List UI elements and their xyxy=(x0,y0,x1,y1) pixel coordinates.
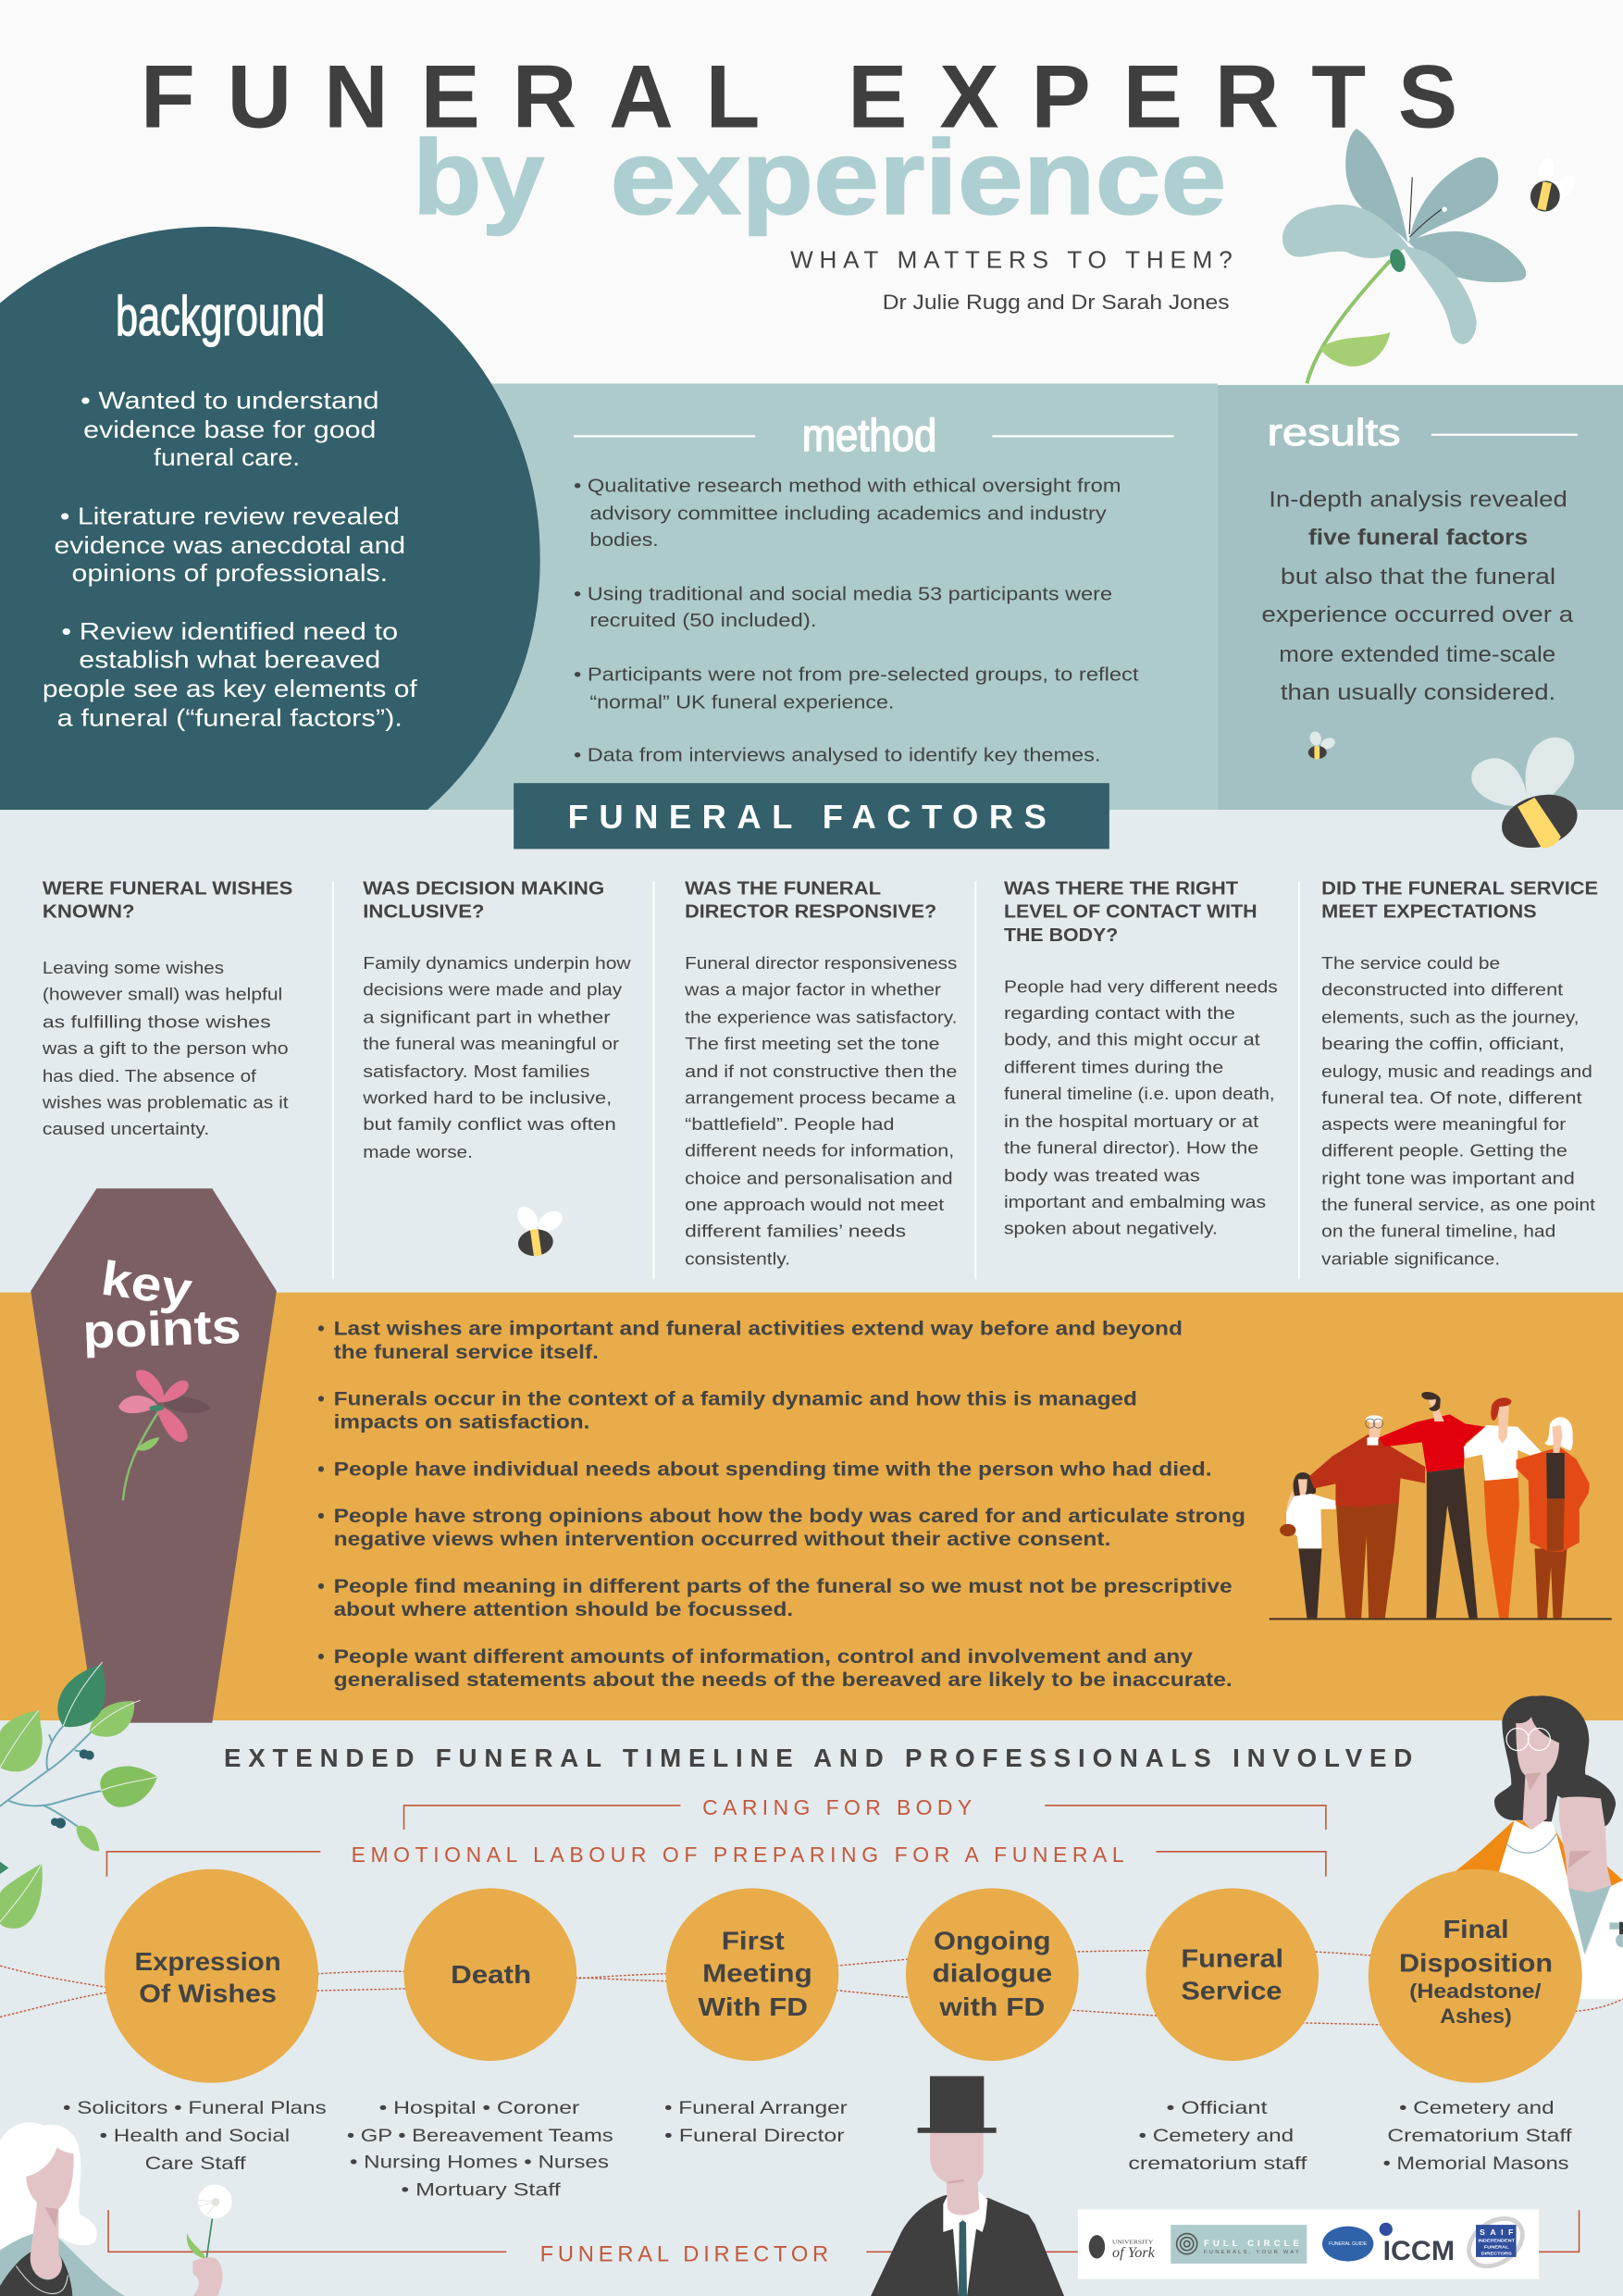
factor 3: director responsive: one approach would not meet xyxy=(685,1195,945,1214)
logo: SAIF: FUNERAL xyxy=(1484,2244,1509,2250)
factor 5: service expectations: on the funeral timeline, had xyxy=(1321,1222,1555,1241)
factor 2: decision making: a significant part in whether xyxy=(363,1008,611,1027)
professionals list: final disposition: • Memorial Masons xyxy=(1383,2153,1569,2174)
background bullet text: evidence was anecdotal and xyxy=(55,531,405,559)
factor 5: service expectations: The service could be xyxy=(1321,953,1500,973)
professionals list: death: • GP • Bereavement Teams xyxy=(347,2126,613,2146)
background bullet text: opinions of professionals. xyxy=(71,559,388,587)
tagline: WHAT MATTERS TO THEM? xyxy=(790,245,1233,273)
panel: timeline background xyxy=(0,1720,1623,2296)
child xyxy=(1280,1472,1335,1618)
timeline node: final disposition: (Headstone/ xyxy=(1409,1980,1541,2003)
factor 1: wishes known: has died. The absence of xyxy=(43,1066,257,1086)
key points list: impacts on satisfaction. xyxy=(334,1411,589,1433)
timeline node: first meeting with FD: With FD xyxy=(698,1992,808,2021)
label: caring for body: CARING FOR BODY xyxy=(702,1795,972,1819)
column dividers xyxy=(332,881,1300,1279)
panel: method xyxy=(0,383,1218,810)
key points list: People have strong opinions about how the body was cared for and articulate strong xyxy=(334,1505,1245,1527)
icon: large bee xyxy=(1471,738,1583,856)
factor 1: wishes known: was a gift to the person who xyxy=(42,1038,289,1058)
background bullet text: evidence base for good xyxy=(83,416,376,443)
factor 1: wishes known: as fulfilling those wishes xyxy=(43,1011,271,1031)
subtitle script: by experience: by xyxy=(413,119,544,237)
factor 5: service expectations: the funeral service, as one point xyxy=(1321,1195,1596,1214)
heading: key: key xyxy=(98,1252,195,1318)
method bullet list: • Participants were not from pre-selected groups, to reflect xyxy=(574,664,1139,685)
professionals list: first meeting: • Funeral Director xyxy=(664,2126,845,2146)
results text: but also that the funeral xyxy=(1281,565,1555,590)
label: caring for body xyxy=(404,1795,1326,1830)
illustration: family group xyxy=(1270,1392,1612,1620)
heading: results: results xyxy=(1268,411,1401,453)
factor 1: wishes known: wishes was problematic as it xyxy=(42,1092,289,1111)
timeline node: final disposition: Final xyxy=(1443,1915,1509,1943)
timeline node: final disposition: Disposition xyxy=(1399,1948,1553,1977)
key points list: People have individual needs about spending time with the person who had died. xyxy=(334,1458,1212,1480)
timeline node: ongoing dialogue with FD: dialogue xyxy=(932,1959,1052,1988)
key points list: about where attention should be focussed. xyxy=(334,1598,793,1620)
factor 1: wishes known: caused uncertainty. xyxy=(43,1119,209,1138)
label: funeral director xyxy=(108,2210,1580,2267)
background bullet text: funeral care. xyxy=(154,443,300,471)
factor 5: service expectations: aspects were meaningful for xyxy=(1321,1114,1566,1134)
dashed connector lines xyxy=(0,1950,1623,2026)
key points list: • xyxy=(317,1387,325,1409)
factor 2: decision making: INCLUSIVE? xyxy=(363,901,485,923)
factor 4: contact with body: THE BODY? xyxy=(1004,925,1118,946)
method bullet list: • Data from interviews analysed to identify key themes. xyxy=(574,744,1100,765)
professionals list: final disposition xyxy=(1383,2098,1572,2174)
key points list: Funerals occur in the context of a family dynamic and how this is managed xyxy=(334,1387,1137,1409)
timeline node: funeral service: Funeral xyxy=(1181,1944,1283,1973)
icon: small bee xyxy=(1308,730,1337,759)
professionals list: funeral service xyxy=(1128,2098,1307,2174)
factor 4: contact with body: the funeral director). How the xyxy=(1004,1137,1258,1157)
subtitle script: by experience xyxy=(413,119,1226,237)
factor 2: decision making: Family dynamics underpin how xyxy=(363,953,631,973)
key points list: generalised statements about the needs of the bereaved are likely to be inaccurate. xyxy=(334,1669,1233,1691)
factor 4: contact with body xyxy=(1004,877,1278,1237)
illustration: woman with glasses xyxy=(1456,1695,1623,1999)
factor 3: director responsive: The first meeting set the tone xyxy=(685,1034,939,1053)
logo strip xyxy=(1078,2209,1539,2279)
factor 4: contact with body: People had very different needs xyxy=(1004,976,1278,996)
factor 5: service expectations: different people. Getting the xyxy=(1321,1141,1567,1160)
key points list: Last wishes are important and funeral activities extend way before and beyond xyxy=(334,1317,1183,1339)
results text: In-depth analysis revealed xyxy=(1269,488,1567,512)
logo: university of york: UNIVERSITY xyxy=(1112,2240,1154,2246)
coffin: key points xyxy=(31,1188,277,1723)
key points list: the funeral service itself. xyxy=(334,1341,599,1363)
grandmother xyxy=(1516,1417,1590,1618)
factor 3: director responsive: different needs for information, xyxy=(685,1141,954,1160)
background bullet text: people see as key elements of xyxy=(43,675,418,702)
factor 2: decision making: made worse. xyxy=(363,1142,473,1161)
key points list: • xyxy=(317,1505,325,1527)
grandfather xyxy=(1309,1415,1425,1618)
professionals list: death: • Mortuary Staff xyxy=(401,2179,561,2200)
panel: key points band xyxy=(0,1293,1623,1720)
panel: funeral factors background xyxy=(0,810,1623,1293)
panel: background circle xyxy=(0,227,540,810)
logo: full circle: FUNERALS, YOUR WAY xyxy=(1204,2250,1299,2255)
factor 4: contact with body: body, and this might occur at xyxy=(1004,1029,1261,1049)
subtitle script: by experience: experience xyxy=(611,119,1226,237)
logo: ICCM: ICCM xyxy=(1383,2236,1455,2266)
timeline node: death xyxy=(404,1888,576,2061)
timeline node: death: Death xyxy=(451,1960,531,1989)
heading: background: background xyxy=(116,285,325,347)
timeline node: first meeting with FD: First xyxy=(722,1927,785,1955)
factor 4: contact with body: different times during the xyxy=(1004,1057,1223,1076)
professionals list: death xyxy=(347,2098,613,2200)
background bullet text: establish what bereaved xyxy=(79,645,380,673)
logo: full circle xyxy=(1171,2225,1307,2264)
factor 2: decision making: worked hard to be inclusive, xyxy=(362,1088,612,1108)
factor 4: contact with body: funeral timeline (i.e. upon death, xyxy=(1004,1084,1275,1103)
method bullet list: advisory committee including academics and industry xyxy=(589,503,1108,525)
logo: ICCM xyxy=(1380,2223,1455,2266)
background bullet text: • Literature review revealed xyxy=(60,502,400,529)
icon: large teal flower xyxy=(1282,129,1526,383)
factor 5: service expectations: elements, such as the journey, xyxy=(1321,1008,1580,1027)
key points list: • xyxy=(317,1317,325,1339)
illustration: undertaker xyxy=(871,2076,1064,2296)
professionals list: funeral service: • Cemetery and xyxy=(1138,2126,1294,2146)
logo: funeral guide: FUNERAL GUIDE xyxy=(1329,2241,1368,2247)
background bullet text xyxy=(43,386,418,732)
label: emotional labour: EMOTIONAL LABOUR OF PREPARING FOR A FUNERAL xyxy=(352,1843,1124,1867)
key points list xyxy=(317,1317,1245,1691)
timeline node: ongoing dialogue with FD: Ongoing xyxy=(934,1927,1051,1955)
logo: SAIF: DIRECTORS xyxy=(1481,2252,1512,2257)
icon: bee top right xyxy=(1526,155,1581,218)
professionals list: death: • Nursing Homes • Nurses xyxy=(350,2152,609,2172)
icon: bee in factors xyxy=(513,1198,570,1259)
factor 2: decision making xyxy=(362,877,631,1161)
background bullet text: • Wanted to understand xyxy=(81,386,379,414)
background bullet text: a funeral (“funeral factors”). xyxy=(57,704,403,732)
factor 5: service expectations xyxy=(1321,877,1598,1269)
key points list: • xyxy=(317,1458,325,1480)
logo: university of york: of York xyxy=(1112,2245,1156,2261)
factor 4: contact with body: important and embalming was xyxy=(1004,1192,1266,1211)
factor 5: service expectations: right tone was important and xyxy=(1321,1169,1575,1188)
professionals list: wishes xyxy=(63,2098,327,2174)
factor 2: decision making: WAS DECISION MAKING xyxy=(363,877,604,899)
dandelion flower xyxy=(187,2184,232,2296)
factor 2: decision making: but family conflict was often xyxy=(363,1114,616,1134)
factor 5: service expectations: variable significance. xyxy=(1321,1249,1500,1269)
factor 1: wishes known: KNOWN? xyxy=(43,901,135,923)
factor 3: director responsive: DIRECTOR RESPONSIVE? xyxy=(685,901,936,923)
factor 2: decision making: satisfactory. Most families xyxy=(363,1061,589,1081)
illustration: woman with dandelion xyxy=(0,2122,232,2296)
professionals list: wishes: • Health and Social xyxy=(100,2126,290,2146)
professionals list: final disposition: Crematorium Staff xyxy=(1387,2126,1572,2146)
factor 3: director responsive: different families’ needs xyxy=(685,1222,906,1241)
timeline heading: EXTENDED FUNERAL TIMELINE AND PROFESSIONALS INVOLVED xyxy=(224,1744,1412,1772)
heading: method: method xyxy=(802,411,936,461)
panel: results xyxy=(1218,385,1623,810)
timeline node: ongoing dialogue with FD: with FD xyxy=(938,1992,1045,2021)
professionals list: death: • Hospital • Coroner xyxy=(379,2098,580,2118)
factor 5: service expectations: funeral tea. Of note, different xyxy=(1321,1088,1583,1108)
factor 2: decision making: the funeral was meaningful or xyxy=(363,1034,619,1053)
factor 3: director responsive: was a major factor in whether xyxy=(684,980,941,999)
factor 4: contact with body: spoken about negatively. xyxy=(1004,1218,1218,1237)
authors: Dr Julie Rugg and Dr Sarah Jones xyxy=(883,291,1230,314)
key points list: • xyxy=(317,1575,325,1597)
professionals list: funeral service: crematorium staff xyxy=(1128,2153,1307,2174)
timeline node: first meeting with FD xyxy=(666,1888,838,2061)
factor 3: director responsive: the experience was satisfactory. xyxy=(685,1008,957,1027)
logo: university of york xyxy=(1089,2235,1156,2261)
factor 5: service expectations: eulogy, music and readings and xyxy=(1321,1061,1592,1081)
logo: SAIF: INDEPENDENT xyxy=(1478,2238,1515,2243)
key points list: • xyxy=(317,1645,325,1668)
factor 5: service expectations: DID THE FUNERAL SERVICE xyxy=(1321,877,1598,899)
logo: funeral guide xyxy=(1322,2227,1373,2262)
timeline node: final disposition: Ashes) xyxy=(1440,2004,1512,2028)
icon: pink flower xyxy=(118,1370,211,1500)
woman in white xyxy=(1464,1397,1543,1618)
label: emotional labour xyxy=(106,1843,1326,1877)
key points list: People want different amounts of information, control and involvement and any xyxy=(334,1645,1193,1668)
factor 4: contact with body: LEVEL OF CONTACT WITH xyxy=(1004,901,1258,923)
factor 3: director responsive xyxy=(684,877,957,1269)
results text: more extended time-scale xyxy=(1279,643,1555,667)
professionals list: funeral service: • Officiant xyxy=(1167,2098,1268,2118)
timeline node: funeral service: Service xyxy=(1181,1977,1282,2005)
factor 2: decision making: decisions were made and play xyxy=(363,980,623,999)
logo: SAIF xyxy=(1460,2209,1531,2276)
background bullet text: • Review identified need to xyxy=(61,617,398,645)
timeline node: expression of wishes: Of Wishes xyxy=(139,1980,277,2008)
results text: than usually considered. xyxy=(1281,681,1555,705)
professionals list: final disposition: • Cemetery and xyxy=(1399,2098,1555,2118)
key points list: People find meaning in different parts of the funeral so we must not be prescriptive xyxy=(334,1575,1233,1597)
factor 3: director responsive: “battlefield”. People had xyxy=(685,1114,894,1134)
label: funeral director: FUNERAL DIRECTOR xyxy=(540,2243,828,2267)
factor 3: director responsive: and if not constructive then the xyxy=(685,1061,957,1081)
factor 4: contact with body: in the hospital mortuary or at xyxy=(1004,1111,1259,1131)
results text xyxy=(1261,488,1574,705)
results text: experience occurred over a xyxy=(1261,603,1574,627)
method bullet list: bodies. xyxy=(589,529,659,551)
timeline node: funeral service xyxy=(1146,1888,1319,2061)
method bullet list: “normal” UK funeral experience. xyxy=(589,692,894,714)
factor 4: contact with body: body was treated was xyxy=(1004,1165,1200,1185)
timeline node: first meeting with FD: Meeting xyxy=(702,1959,812,1988)
factor 5: service expectations: MEET EXPECTATIONS xyxy=(1321,901,1537,923)
results text: five funeral factors xyxy=(1308,526,1528,550)
banner: funeral factors xyxy=(514,783,1109,849)
logo: full circle: FULL CIRCLE xyxy=(1204,2239,1299,2249)
factor 1: wishes known: WERE FUNERAL WISHES xyxy=(43,877,292,899)
factor 3: director responsive: choice and personalisation and xyxy=(685,1169,953,1188)
timeline node: expression of wishes: Expression xyxy=(135,1947,281,1976)
illustration: leaves branch xyxy=(0,1662,157,1929)
timeline node: expression of wishes xyxy=(105,1869,318,2083)
timeline node: final disposition xyxy=(1369,1869,1582,2083)
factor 5: service expectations: bearing the coffin, officiant, xyxy=(1321,1034,1565,1053)
factor 1: wishes known: Leaving some wishes xyxy=(43,958,224,977)
timeline node: ongoing dialogue with FD xyxy=(906,1888,1079,2061)
factor 3: director responsive: Funeral director responsiveness xyxy=(685,953,957,973)
heading: points: points xyxy=(82,1300,242,1359)
factor 3: director responsive: arrangement process became a xyxy=(685,1088,956,1108)
factor 5: service expectations: deconstructed into different xyxy=(1321,980,1564,999)
father xyxy=(1379,1392,1485,1618)
method bullet list: • Qualitative research method with ethical oversight from xyxy=(574,475,1121,496)
factor 3: director responsive: consistently. xyxy=(685,1249,790,1269)
factor 4: contact with body: WAS THERE THE RIGHT xyxy=(1004,877,1239,899)
professionals list: wishes: Care Staff xyxy=(145,2153,246,2174)
professionals list: wishes: • Solicitors • Funeral Plans xyxy=(63,2098,327,2118)
factor 1: wishes known: (however small) was helpful xyxy=(43,984,282,1003)
key points list: negative views when intervention occurred without their active consent. xyxy=(334,1528,1110,1550)
factor 4: contact with body: regarding contact with the xyxy=(1004,1003,1235,1023)
factor 1: wishes known xyxy=(42,877,292,1138)
banner: funeral factors: FUNERAL FACTORS xyxy=(568,798,1047,836)
professionals list: first meeting xyxy=(664,2098,848,2146)
factor 3: director responsive: WAS THE FUNERAL xyxy=(685,877,881,899)
method bullet list: • Using traditional and social media 53 participants were xyxy=(574,584,1112,605)
logo: SAIF: SAIF xyxy=(1480,2228,1513,2237)
professionals list: first meeting: • Funeral Arranger xyxy=(664,2098,848,2118)
method bullet list xyxy=(574,475,1139,765)
method bullet list: recruited (50 included). xyxy=(589,610,817,631)
title: FUNERAL EXPERTS xyxy=(141,48,1457,147)
